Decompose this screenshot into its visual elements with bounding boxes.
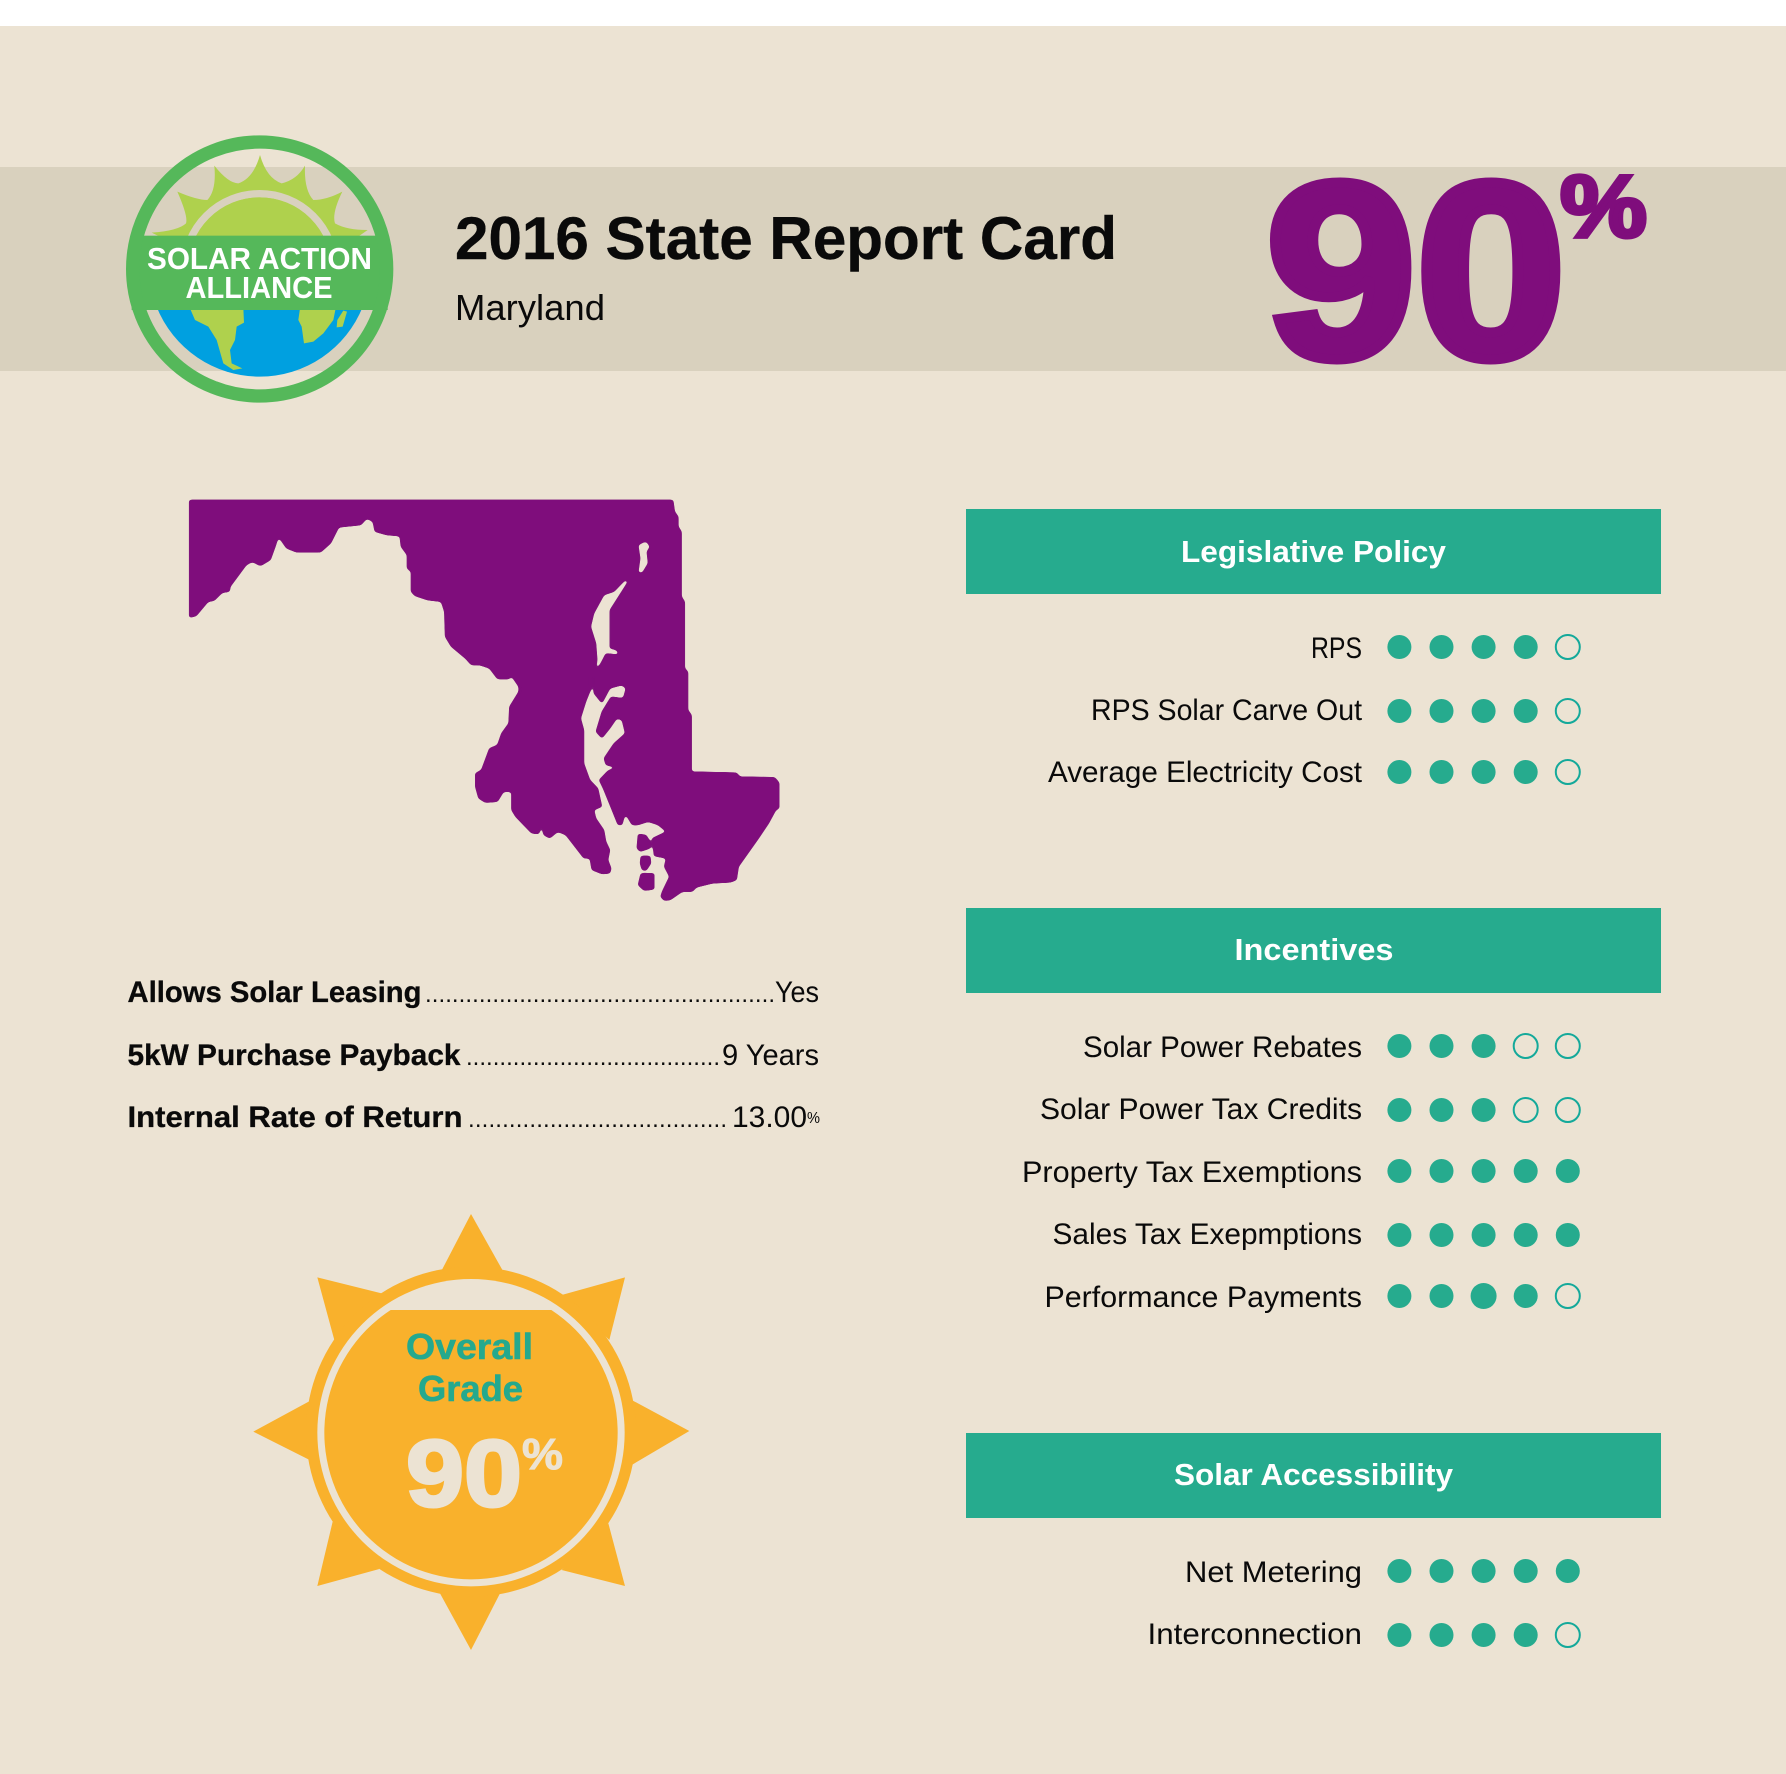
badge inner ring [317,1279,625,1586]
logo outer ring [133,142,387,396]
panel: legislative policy [966,509,1661,789]
badge rays [253,1214,689,1650]
row: sales tax exemptions: Sales Tax Exepmptions [1052,1218,1362,1251]
stat: purchase payback: ...................................... [466,1044,720,1071]
row: property tax exemptions: Property Tax Exemptions [1022,1156,1362,1189]
stat: purchase payback: 9 Years [722,1039,819,1072]
stat: solar leasing: .................................................... [425,981,775,1008]
logo sun rays [152,155,368,240]
panel: solar accessibility [966,1433,1661,1651]
stat: solar leasing: Yes [775,976,819,1009]
row: interconnection: Interconnection [1148,1618,1362,1651]
logo banner [132,236,388,310]
row: net metering [1185,1556,1580,1589]
heading: incentives [966,908,1661,993]
map of Maryland [189,500,779,901]
logo ocean [157,307,363,377]
row: RPS solar carve out [1091,694,1580,727]
big score percent sign: % [1560,157,1647,256]
logo: Solar Action Alliance [132,142,388,396]
heading: legislative policy: Legislative Policy [1181,534,1447,569]
logo sun disc [188,197,331,341]
row: RPS: RPS [1311,632,1362,665]
row: solar power rebates: Solar Power Rebates [1083,1031,1362,1064]
badge heading line 1: Overall [406,1326,533,1367]
heading: incentives: Incentives [1234,932,1394,967]
heading: solar accessibility: Solar Accessibility [1174,1457,1454,1492]
overall grade sun badge [253,1214,689,1650]
row: RPS [1311,632,1580,665]
heading: legislative policy [966,509,1661,594]
row: RPS solar carve out: RPS Solar Carve Out [1091,694,1363,727]
stat: internal rate of return: 13.00 [732,1101,807,1134]
row: average electricity cost: Average Electricity Cost [1048,756,1363,789]
badge heading line 2: Grade [418,1368,523,1409]
row: interconnection [1148,1618,1580,1651]
badge outer disc [306,1267,636,1597]
badge percent sign: % [522,1430,563,1479]
badge score: 90 [406,1421,522,1527]
stat: internal rate of return: ...................................... [468,1106,727,1133]
stat: purchase payback [128,1039,819,1072]
row: sales tax exemptions [1052,1218,1580,1251]
panel: incentives [966,908,1661,1314]
header band [0,167,1786,371]
title: 2016 State Report Card [455,205,1117,272]
stat: purchase payback: 5kW Purchase Payback [128,1039,461,1072]
stat: solar leasing [128,976,819,1009]
logo text line 2: ALLIANCE [186,270,332,305]
logo text line 1: SOLAR ACTION [147,241,372,276]
badge inner disc [324,1310,618,1579]
row: property tax exemptions [1022,1156,1580,1189]
row: solar power tax credits: Solar Power Tax Credits [1040,1093,1362,1126]
row: average electricity cost [1048,756,1580,789]
heading: solar accessibility [966,1433,1661,1518]
logo continents [190,308,347,370]
big score number: 90 [1266,131,1566,410]
subtitle: state name: Maryland [455,287,605,328]
row: net metering: Net Metering [1185,1556,1362,1589]
row: performance payments [1044,1281,1580,1314]
stat: internal rate of return [128,1101,820,1134]
stat: internal rate of return: Internal Rate of Return [128,1101,462,1134]
row: solar power tax credits [1040,1093,1580,1126]
row: solar power rebates [1083,1031,1580,1064]
stat: solar leasing: Allows Solar Leasing [128,976,422,1009]
stats list [128,976,820,1134]
logo sun ring [184,194,335,344]
stat: internal rate of return: % [807,1110,820,1127]
big score [1266,131,1647,410]
row: performance payments: Performance Payments [1044,1281,1362,1314]
